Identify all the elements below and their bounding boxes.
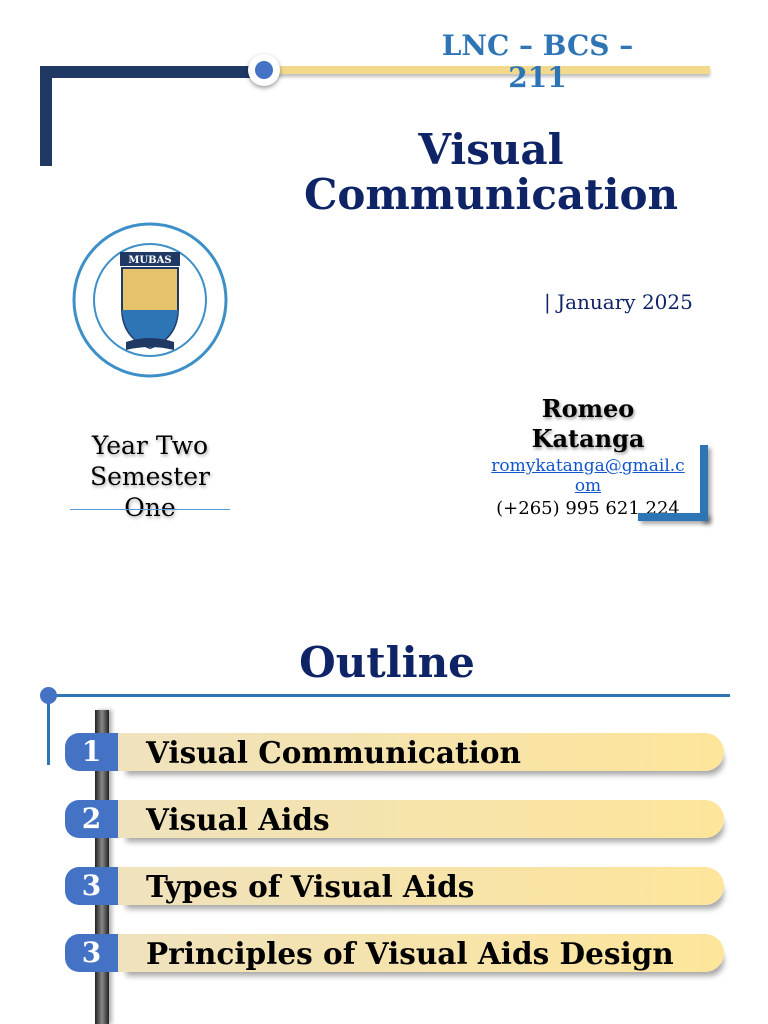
item 4 bbox=[65, 934, 728, 980]
presenter: om bbox=[575, 476, 601, 496]
presenter: (+265) 995 621 224 bbox=[496, 498, 680, 519]
item 4: 3 bbox=[82, 936, 101, 969]
dark corner bracket bbox=[40, 66, 250, 166]
item 1: 1 bbox=[82, 735, 101, 768]
item 3 bbox=[65, 867, 728, 912]
presenter: Katanga bbox=[532, 424, 644, 453]
item 1 bbox=[65, 733, 728, 778]
item 2 bbox=[65, 800, 728, 846]
logo: MUBAS bbox=[128, 255, 172, 266]
timeline line bbox=[40, 687, 730, 765]
yellow line bbox=[276, 66, 710, 74]
presenter: Romeo bbox=[542, 394, 634, 423]
item 1: Visual Communication bbox=[146, 735, 521, 770]
course code: LNC – BCS – 211 bbox=[442, 29, 633, 94]
item 3: 3 bbox=[82, 869, 101, 902]
title: Visual Communication bbox=[304, 125, 678, 219]
outline heading: Outline bbox=[299, 638, 475, 687]
item 3: Types of Visual Aids bbox=[146, 869, 474, 904]
vertical spine bbox=[95, 710, 109, 1024]
presenter bbox=[491, 394, 685, 519]
date: | January 2025 bbox=[544, 290, 693, 314]
logo bbox=[72, 222, 228, 378]
item 4: Principles of Visual Aids Design bbox=[146, 936, 674, 971]
item 2: Visual Aids bbox=[146, 802, 330, 837]
item 2: 2 bbox=[82, 802, 101, 835]
presenter: romykatanga@gmail.c bbox=[491, 456, 685, 476]
blue bracket bbox=[638, 445, 714, 528]
year semester: Year Two Semester One bbox=[90, 431, 210, 522]
dot connector bbox=[248, 54, 280, 86]
